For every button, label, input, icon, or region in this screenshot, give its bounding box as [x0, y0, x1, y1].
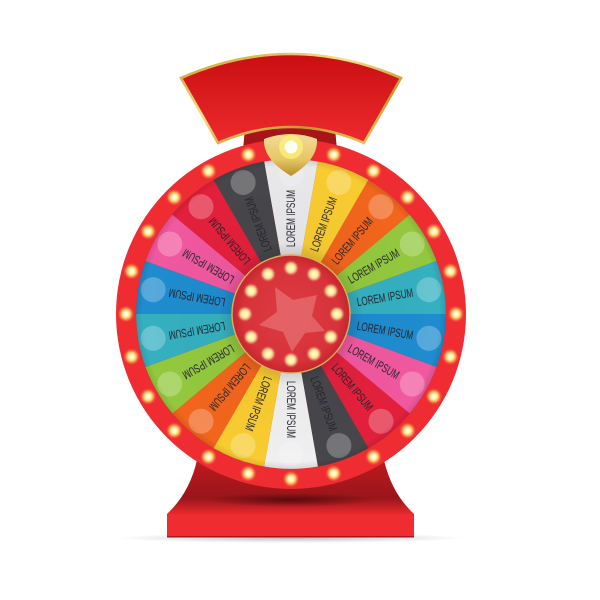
wheel	[116, 139, 466, 489]
centre hub	[232, 255, 350, 373]
segment: yellow lower left: LOREM IPSUM	[242, 375, 275, 433]
ring lights	[118, 144, 465, 488]
segment: white bottom	[264, 314, 318, 469]
segment: lime: LOREM IPSUM	[346, 246, 402, 287]
segment: pink left	[143, 213, 304, 337]
hub lights	[237, 260, 345, 368]
segment: teal	[286, 261, 448, 340]
segment: orange lower left	[171, 297, 312, 450]
segment: orange: LOREM IPSUM	[329, 215, 376, 267]
segment: yellow: LOREM IPSUM	[307, 195, 340, 253]
segment: dark	[266, 305, 369, 469]
floor shadow	[116, 533, 466, 543]
segment: white top	[264, 159, 318, 314]
segment: orange lower left: LOREM IPSUM	[206, 361, 253, 413]
segment: pink: LOREM IPSUM	[346, 341, 402, 382]
segment: lime left	[143, 291, 304, 415]
segment: red	[270, 297, 411, 450]
segment: dark left	[213, 159, 316, 323]
segment: yellow lower left	[213, 305, 316, 469]
segment: blue left	[134, 261, 296, 340]
segment: pink left: LOREM IPSUM	[180, 246, 236, 287]
outer ring	[116, 139, 466, 489]
segment: white bottom: LOREM IPSUM	[284, 381, 298, 438]
ring inner edge	[136, 159, 446, 469]
segment: teal left: LOREM IPSUM	[168, 319, 226, 342]
pointer light	[279, 135, 303, 159]
stand	[167, 460, 414, 538]
segment: dark: LOREM IPSUM	[307, 375, 340, 433]
top banner	[181, 54, 401, 143]
hub star	[259, 287, 325, 352]
banner connector	[243, 128, 337, 150]
segment: lime	[278, 213, 439, 337]
segment: teal: LOREM IPSUM	[356, 286, 414, 309]
coloured segments	[134, 159, 448, 469]
segment: red left	[171, 178, 312, 331]
segment: red: LOREM IPSUM	[329, 361, 376, 413]
segment: blue	[286, 288, 448, 367]
segment: white top: LOREM IPSUM	[284, 190, 298, 247]
segment: lime left: LOREM IPSUM	[180, 341, 236, 382]
segment: blue left: LOREM IPSUM	[168, 286, 226, 309]
segment: dark left: LOREM IPSUM	[242, 195, 275, 253]
segment: teal left	[134, 288, 296, 367]
segment shading	[136, 159, 446, 469]
segment: pink	[278, 291, 439, 415]
gold pointer	[264, 134, 317, 176]
segment: red left: LOREM IPSUM	[206, 215, 253, 267]
segment: blue: LOREM IPSUM	[356, 319, 414, 342]
segment: orange	[270, 178, 411, 331]
segment: yellow	[266, 159, 369, 323]
